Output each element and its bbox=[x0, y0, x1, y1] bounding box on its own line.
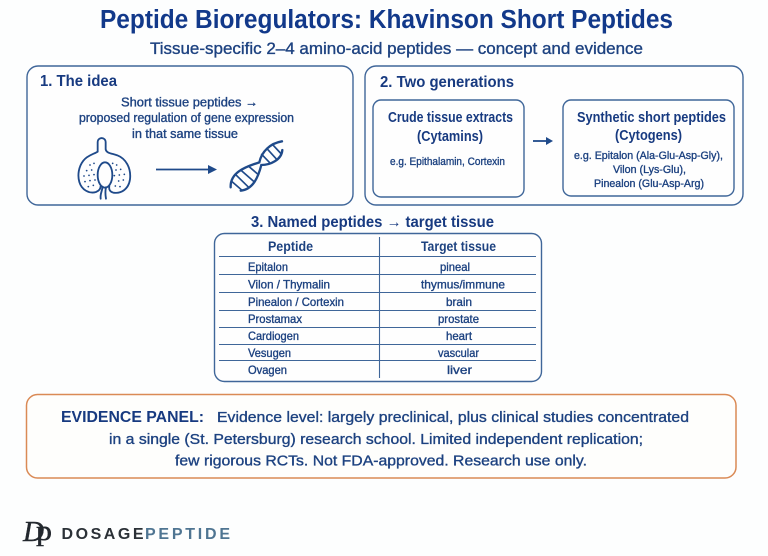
heading: the idea: 1. The idea bbox=[40, 73, 117, 90]
icon: pineal gland bbox=[78, 138, 130, 199]
table header: Target tissue bbox=[421, 239, 496, 254]
table: peptide to target tissue bbox=[214, 234, 542, 382]
column: target tissues: vascular bbox=[438, 346, 479, 360]
card: crude tissue extracts bbox=[373, 100, 524, 197]
text: idea description: proposed regulation of gene expression bbox=[79, 111, 294, 125]
text: idea description: Short tissue peptides → bbox=[121, 96, 258, 110]
evidence text: Evidence level: largely preclinical, plus clinical studies concentrated bbox=[217, 409, 689, 426]
card: crude tissue extracts: (Cytamins) bbox=[417, 129, 483, 145]
evidence text: in a single (St. Petersburg) research school. Limited independent replication; bbox=[109, 431, 643, 448]
column: peptide names: Cardiogen bbox=[248, 329, 299, 343]
card: crude tissue extracts: Crude tissue extracts bbox=[388, 110, 513, 126]
text: idea description bbox=[79, 96, 294, 141]
column: target tissues: brain bbox=[446, 295, 472, 309]
logo: DosagePeptide: p bbox=[36, 516, 52, 547]
column: target tissues: pineal bbox=[440, 260, 470, 274]
evidence text: few rigorous RCTs. Not FDA-approved. Research use only. bbox=[175, 452, 587, 470]
column: peptide names: Pinealon / Cortexin bbox=[248, 295, 344, 309]
column: peptide names: Prostamax bbox=[248, 312, 302, 326]
column: target tissues: liver bbox=[447, 363, 472, 377]
card: synthetic short peptides: (Cytogens) bbox=[615, 128, 682, 144]
card: synthetic short peptides: Pinealon (Glu-Asp-Arg) bbox=[594, 178, 704, 190]
card: synthetic short peptides bbox=[563, 100, 734, 196]
heading: two generations: 2. Two generations bbox=[380, 74, 514, 91]
column: peptide names: Vesugen bbox=[248, 346, 291, 360]
column: target tissues: prostate bbox=[438, 312, 479, 326]
arrow: crude to synthetic bbox=[533, 137, 553, 145]
panel: evidence bbox=[26, 394, 736, 478]
column: peptide names: Ovagen bbox=[248, 363, 287, 377]
arrow: peptide to gene bbox=[156, 165, 217, 174]
title: Peptide Bioregulators: Khavinson Short Peptides bbox=[100, 6, 673, 34]
evidence text bbox=[109, 409, 689, 470]
column: target tissues: heart bbox=[446, 329, 473, 343]
card: synthetic short peptides: e.g. Epitalon (Ala-Glu-Asp-Gly), bbox=[574, 150, 723, 162]
text: idea description: in that same tissue bbox=[132, 127, 238, 141]
panel: the idea bbox=[27, 66, 353, 205]
column: peptide names: Epitalon bbox=[248, 260, 288, 274]
column: peptide names bbox=[248, 260, 344, 377]
heading: named peptides: 3. Named peptides → target tissue bbox=[251, 214, 494, 231]
card: synthetic short peptides: Synthetic short peptides bbox=[577, 110, 726, 126]
logo: DosagePeptide: DOSAGE bbox=[62, 526, 144, 543]
table header: Peptide bbox=[268, 239, 313, 254]
logo: DosagePeptide bbox=[22, 516, 230, 548]
column: peptide names: Vilon / Thymalin bbox=[248, 278, 330, 292]
table header bbox=[268, 239, 496, 254]
subtitle: Tissue-specific 2–4 amino-acid peptides — concept and evidence bbox=[150, 40, 643, 58]
panel: two generations bbox=[365, 66, 743, 205]
column: target tissues bbox=[421, 260, 505, 377]
icon: dna helix bbox=[231, 141, 282, 191]
logo: DosagePeptide: D bbox=[22, 516, 44, 548]
evidence label: EVIDENCE PANEL: bbox=[61, 409, 204, 426]
card: crude tissue extracts: e.g. Epithalamin, Cortexin bbox=[390, 156, 505, 168]
card: synthetic short peptides: Vilon (Lys-Glu), bbox=[613, 164, 686, 176]
column: target tissues: thymus/immune bbox=[421, 278, 505, 292]
logo: DosagePeptide: PEPTIDE bbox=[145, 526, 230, 543]
